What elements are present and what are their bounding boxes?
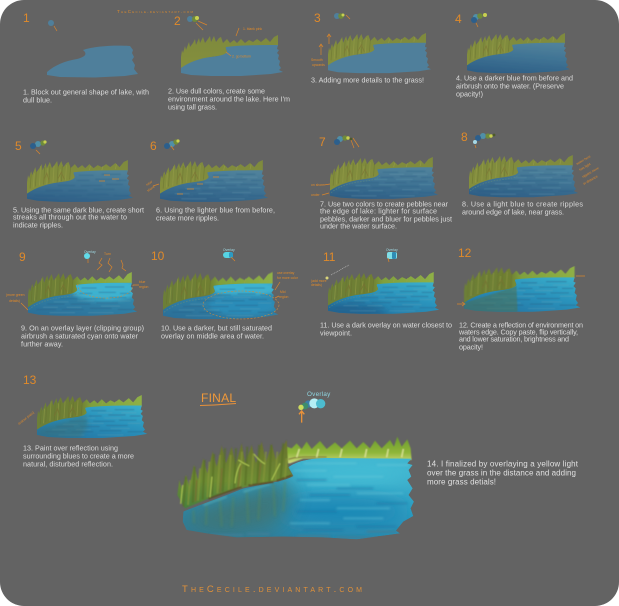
step number 1: 1 <box>23 11 30 25</box>
caption 4 <box>456 74 573 98</box>
palette with overlay label: Overlay <box>307 391 331 398</box>
colour swatches with arrow <box>334 13 350 19</box>
annotation labels: for more color <box>277 276 299 280</box>
caption 5 <box>13 206 144 230</box>
viewpoint annotation: details) <box>311 283 322 287</box>
lake with dark ripples <box>27 160 133 202</box>
annotation labels: details) <box>9 299 20 303</box>
caption 2: 2. Use dull colors, create some <box>168 86 265 96</box>
annotation squiggles: Turn <box>104 252 111 256</box>
panel: step 6 <box>145 139 275 222</box>
colour swatches with arrow <box>164 139 180 150</box>
overlay swatch <box>84 250 96 263</box>
annotation arrows <box>311 34 331 67</box>
step number 2: 2 <box>174 14 181 28</box>
annotation labels: use overlay <box>277 271 295 275</box>
caption 10: 10. Use a darker, but still saturated <box>161 324 272 332</box>
annotation: pebbles: on shore <box>311 183 324 187</box>
caption 8 <box>462 200 583 216</box>
caption 10 <box>161 324 272 340</box>
caption 12: opacity! <box>459 342 483 352</box>
annotation arrows <box>177 177 219 194</box>
caption 13: surrounding blues to create a more <box>23 452 134 460</box>
annotation labels <box>275 271 299 299</box>
caption 14 <box>427 460 579 486</box>
caption 1: 1. Block out general shape of lake, with <box>23 88 149 96</box>
overlay swatch: Overlay <box>84 250 96 254</box>
caption 2 <box>168 86 290 112</box>
lake with pebbles <box>330 157 438 199</box>
caption 8: around edge of lake, near grass. <box>462 208 564 216</box>
annotation: far ripples: has light <box>578 162 591 172</box>
caption 9: further away. <box>21 340 63 348</box>
caption 5: streaks all through out the water to <box>13 212 127 222</box>
caption 4: 4. Use a darker blue from before and <box>456 74 573 82</box>
step number 12: 12 <box>458 246 472 260</box>
annotation: pebbles: under <box>311 193 321 197</box>
annotation arrows <box>99 175 119 181</box>
step number 10: 10 <box>151 249 165 263</box>
step number 13: 13 <box>23 373 37 387</box>
caption 3: 3. Adding more details to the grass! <box>311 76 424 84</box>
annotation labels <box>6 280 149 310</box>
caption 12: 12. Create a reflection of environment on <box>459 320 583 330</box>
panel: step 7 <box>311 135 452 230</box>
caption 2: environment around the lake. Here I'm <box>168 94 290 104</box>
colour swatches with arrow <box>473 133 495 148</box>
caption 12: and lower saturation, brightness and <box>459 334 569 344</box>
overlay swatch: Overlay <box>223 248 235 252</box>
step number 4: 4 <box>455 12 462 26</box>
viewpoint annotation: (add more <box>311 279 327 283</box>
lake with cyan overlay <box>28 272 137 316</box>
caption 11: viewpoint. <box>320 328 352 338</box>
caption 6: create more ripples. <box>156 214 219 222</box>
step number 9: 9 <box>19 250 26 264</box>
panel: step 8 <box>461 130 600 216</box>
panel: final <box>177 391 579 539</box>
caption 9: 9. On an overlay layer (clipping group) <box>21 324 144 332</box>
colour swatch with arrow <box>48 20 57 31</box>
lake with detailed grass <box>328 33 431 73</box>
step number 3: 3 <box>314 11 321 25</box>
caption 7: under the water surface. <box>320 222 397 230</box>
annotation: go bottom: 2. go bottom <box>232 54 251 58</box>
caption 12: waters edge. Copy paste, flip vertically, <box>458 328 578 336</box>
annotation: far ripples <box>576 154 600 186</box>
lake with shore ripples <box>469 155 578 197</box>
caption 6 <box>156 206 275 222</box>
caption 13: 13. Paint over reflection using <box>23 444 118 452</box>
overlay swatch: Overlay <box>386 248 398 252</box>
caption 11 <box>320 320 452 338</box>
caption 7: the edge of lake: lighter for surface <box>320 206 437 216</box>
caption 1 <box>23 88 149 104</box>
caption 14: more grass detials! <box>427 478 496 486</box>
annotation: far ripples: in distance <box>582 174 599 186</box>
palette with overlay label <box>298 391 331 423</box>
caption 13 <box>23 444 134 468</box>
caption 12 <box>458 320 583 352</box>
panel: step 1 <box>23 11 149 104</box>
top credit: TheCecile.deviantart.com <box>117 9 194 14</box>
annotation: block grass: 1. blank pink <box>243 27 262 31</box>
annotation squiggles <box>97 252 126 272</box>
caption 13: natural, disturbed reflection. <box>23 460 113 468</box>
caption 14: over the grass in the distance and adding <box>427 468 576 478</box>
annotation labels: (more green <box>6 293 25 297</box>
caption 6: 6. Using the lighter blue from before, <box>156 206 275 214</box>
annotation labels: region <box>279 295 289 299</box>
caption 1: dull blue. <box>23 96 52 104</box>
annotation labels: region <box>139 285 149 289</box>
dashed middle region <box>203 291 279 319</box>
panel: step 11 <box>300 248 452 338</box>
annotation: near shore <box>145 179 159 193</box>
annotation: near shore: near <box>145 179 154 187</box>
caption 7: 7. Use two colors to create pebbles near <box>320 200 449 208</box>
annotation: pebbles <box>311 183 330 197</box>
caption 2: using tall grass. <box>168 102 217 112</box>
colour swatches with arrow <box>471 13 487 27</box>
panel: step 12 <box>457 246 589 352</box>
final painting <box>177 437 414 539</box>
annotation labels: Mid <box>280 290 286 294</box>
annotation: far ripples: water here <box>576 154 591 166</box>
caption 9 <box>21 324 144 348</box>
caption 9: airbrush a saturated cyan onto water <box>21 332 139 340</box>
lake with reflection <box>464 266 580 312</box>
lake with painted reflection <box>37 395 147 438</box>
caption 10: overlay on middle area of water. <box>161 332 264 340</box>
step number 11: 11 <box>323 250 336 264</box>
colour swatches with arrow <box>30 140 47 154</box>
step number 8: 8 <box>461 130 468 144</box>
water <box>180 458 414 539</box>
dashed far region <box>78 284 133 298</box>
panel: step 3 <box>311 11 431 84</box>
caption 4: airbrush onto the water. (Preserve <box>456 82 564 90</box>
lake with light ripples <box>160 160 268 202</box>
panel: step 9 <box>6 250 149 348</box>
annotation arrows <box>457 276 585 306</box>
panel: step 5 <box>13 139 144 230</box>
viewpoint annotation <box>311 265 349 287</box>
near grass <box>177 440 293 508</box>
lake with near dark overlay <box>328 272 439 314</box>
annotation labels: blue <box>139 280 146 284</box>
caption 14: 14. I finalized by overlaying a yellow light <box>427 460 579 468</box>
overlay swatch <box>386 248 398 262</box>
bottom credit: TheCecile.deviantart.com <box>182 584 362 595</box>
final heading: FINAL <box>201 391 236 405</box>
lake block-out <box>47 46 138 78</box>
step number 6: 6 <box>150 139 157 153</box>
caption 11: 11. Use a dark overlay on water closest to <box>320 320 452 330</box>
step number 5: 5 <box>15 139 22 153</box>
panel: step 4 <box>455 12 573 98</box>
caption 5: indicate ripples. <box>13 220 63 230</box>
annotation arrows: Smooth <box>311 58 323 62</box>
annotation: far ripples: ripples more <box>582 166 600 179</box>
caption 8: 8. Use a light blue to create ripples <box>462 200 583 208</box>
far grass <box>285 437 412 463</box>
panel: step 10 <box>151 248 299 340</box>
annotation arrows: upwards <box>312 63 325 67</box>
lake with grass <box>181 35 283 76</box>
overlay swatch <box>223 248 235 261</box>
caption 7 <box>320 200 452 230</box>
caption 4: opacity!) <box>456 90 483 98</box>
colour swatches with arrows <box>334 135 359 148</box>
annotation: colour pass: (colour pass) <box>17 411 35 426</box>
caption 5: 5. Using the same dark blue, create short <box>13 206 144 214</box>
panel: step 2 <box>168 14 290 112</box>
step number 7: 7 <box>319 135 326 149</box>
panel: step 13 <box>18 376 147 468</box>
caption 7: pebbles, darker and bluer for pebbles just <box>320 214 452 224</box>
lake with airbrushed water <box>467 33 570 73</box>
annotation: near shore: shore <box>146 185 156 193</box>
lake with mid overlay <box>163 272 278 319</box>
colour swatches with arrows <box>187 16 207 30</box>
